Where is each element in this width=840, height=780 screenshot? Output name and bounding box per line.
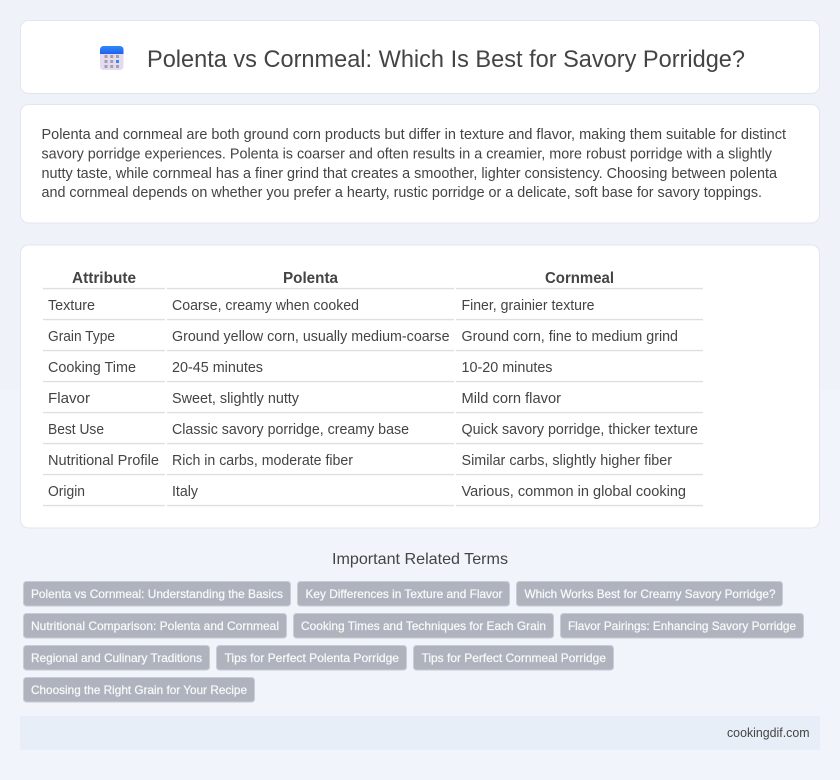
table row: best use: Classic savory porridge, creamy base (172, 422, 409, 438)
footer (20, 716, 820, 750)
table row: origin: Origin (48, 484, 85, 500)
table row: nutritional profile: Nutritional Profile (48, 453, 159, 469)
table row: origin (43, 484, 703, 506)
tag (24, 582, 290, 606)
text block: introduction paragraph (42, 127, 786, 201)
heading: important related terms: Important Related Terms (332, 551, 508, 568)
table row: texture: Coarse, creamy when cooked (172, 298, 359, 314)
related term tags (24, 582, 804, 702)
table row: best use: Best Use (48, 422, 104, 438)
table row: texture: Finer, grainier texture (462, 298, 594, 314)
text block: introduction paragraph: savory porridge experiences. Polenta is coarser and often results in a creamier, more robust porridge with a slightly (42, 146, 773, 162)
table row: nutritional profile: Rich in carbs, moderate fiber (172, 453, 353, 469)
table row: grain type: Ground yellow corn, usually medium-coarse (172, 329, 450, 345)
text block: introduction paragraph: nutty taste, while cornmeal has a finer grind that creates a smoother, lighter consistency. Choosing between polenta (42, 166, 777, 182)
tag: Regional and Culinary Traditions (31, 651, 202, 665)
table row: texture (43, 298, 703, 320)
title: Polenta vs Cornmeal: Which Is Best for Savory Porridge? (147, 46, 745, 73)
table row: origin: Various, common in global cooking (462, 484, 686, 500)
table row: flavor: Mild corn flavor (462, 391, 561, 407)
tag: Flavor Pairings: Enhancing Savory Porridge (568, 619, 796, 633)
tag (414, 646, 614, 670)
table row: texture: Texture (48, 298, 95, 314)
table row: flavor (43, 391, 703, 413)
tag: Cooking Times and Techniques for Each Grain (301, 619, 546, 633)
table row: flavor: Sweet, slightly nutty (172, 391, 300, 407)
text block: introduction paragraph: Polenta and cornmeal are both ground corn products but differ in texture and flavor, making them suitable for distinct (42, 127, 786, 143)
tag (24, 646, 210, 670)
table row: cooking time: Cooking Time (48, 360, 136, 376)
table row: cooking time (43, 360, 703, 382)
table row: flavor: Flavor (48, 391, 90, 407)
table header row (43, 270, 703, 289)
table row: best use (43, 422, 703, 444)
table header row: Cornmeal (545, 270, 614, 287)
panel: title header (20, 20, 820, 94)
table header row: Attribute (72, 270, 136, 287)
tag (516, 582, 782, 606)
tag (298, 582, 510, 606)
tag (560, 614, 804, 638)
tag: Which Works Best for Creamy Savory Porridge? (524, 587, 776, 601)
tag: Tips for Perfect Polenta Porridge (224, 651, 399, 665)
tag (294, 614, 554, 638)
tag (24, 678, 254, 702)
tag (24, 614, 286, 638)
tag: Nutritional Comparison: Polenta and Cornmeal (31, 619, 279, 633)
tag: Choosing the Right Grain for Your Recipe (31, 683, 247, 697)
tag: Key Differences in Texture and Flavor (306, 587, 502, 601)
panel: comparison table (20, 245, 820, 528)
table row: best use: Quick savory porridge, thicker texture (462, 422, 698, 438)
table row: cooking time: 20-45 minutes (172, 360, 263, 376)
table row: nutritional profile: Similar carbs, slightly higher fiber (462, 453, 672, 469)
footer source text: cookingdif.com (727, 726, 810, 740)
table row: grain type (43, 329, 703, 351)
table row: origin: Italy (172, 484, 199, 500)
table header row: Polenta (283, 270, 338, 287)
tag: Tips for Perfect Cornmeal Porridge (422, 651, 606, 665)
icon: calendar (100, 46, 124, 70)
table row: nutritional profile (43, 453, 703, 475)
table row: grain type: Grain Type (48, 329, 115, 345)
tag (216, 646, 406, 670)
table row: grain type: Ground corn, fine to medium grind (462, 329, 678, 345)
tag: Polenta vs Cornmeal: Understanding the Basics (31, 587, 283, 601)
table row: cooking time: 10-20 minutes (462, 360, 552, 376)
text block: introduction paragraph: and cornmeal depends on whether you prefer a hearty, rustic porridge or a delicate, soft base for savory toppings. (42, 185, 762, 201)
panel: introduction (20, 104, 820, 223)
